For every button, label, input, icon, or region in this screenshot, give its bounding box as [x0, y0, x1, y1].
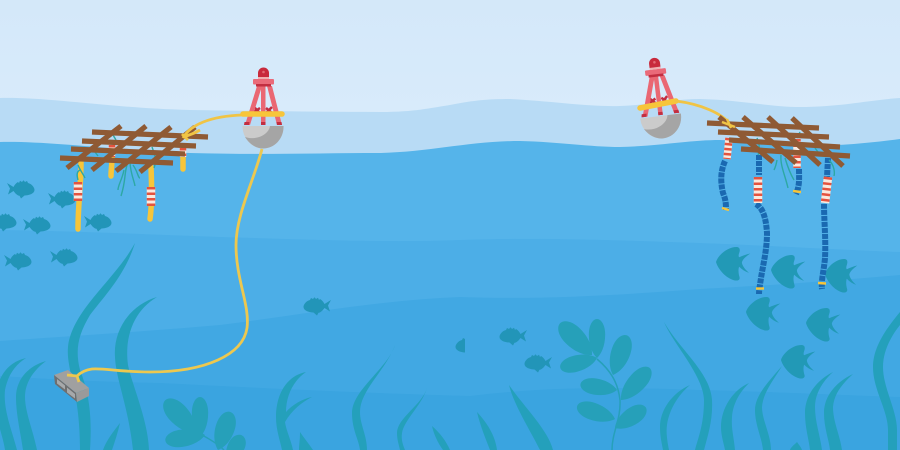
hanging lines: left raft — [78, 147, 183, 229]
striped sleeves: right raft — [727, 138, 828, 203]
school of angelfish — [716, 247, 857, 379]
buoy collar — [243, 111, 282, 117]
raft: left — [60, 126, 208, 229]
leaf plant: centre — [553, 316, 657, 450]
buoy: left — [242, 68, 284, 148]
leaf plant: left — [158, 393, 250, 450]
mooring rope: left — [67, 149, 262, 382]
small fish: middle — [304, 297, 552, 372]
deep water layer — [0, 275, 900, 450]
seaweed — [0, 243, 900, 450]
back wave — [0, 98, 900, 450]
striped sleeves: left raft — [78, 145, 183, 206]
water surface — [0, 139, 900, 450]
concrete block anchor — [54, 370, 89, 402]
seabed water layer — [0, 376, 900, 450]
algae: right raft — [757, 132, 834, 188]
school of small fish: left — [0, 180, 112, 270]
buoy: right — [633, 55, 684, 141]
rope from raft to buoy: left — [182, 115, 243, 140]
buoy collar and rope: right — [640, 101, 731, 125]
rope knot: right raft — [722, 119, 735, 128]
beaded lines: right raft — [721, 155, 828, 294]
algae: left raft — [77, 135, 155, 196]
mid water layer — [0, 230, 900, 450]
raft: right — [707, 117, 850, 294]
line tags: right raft — [722, 191, 826, 288]
